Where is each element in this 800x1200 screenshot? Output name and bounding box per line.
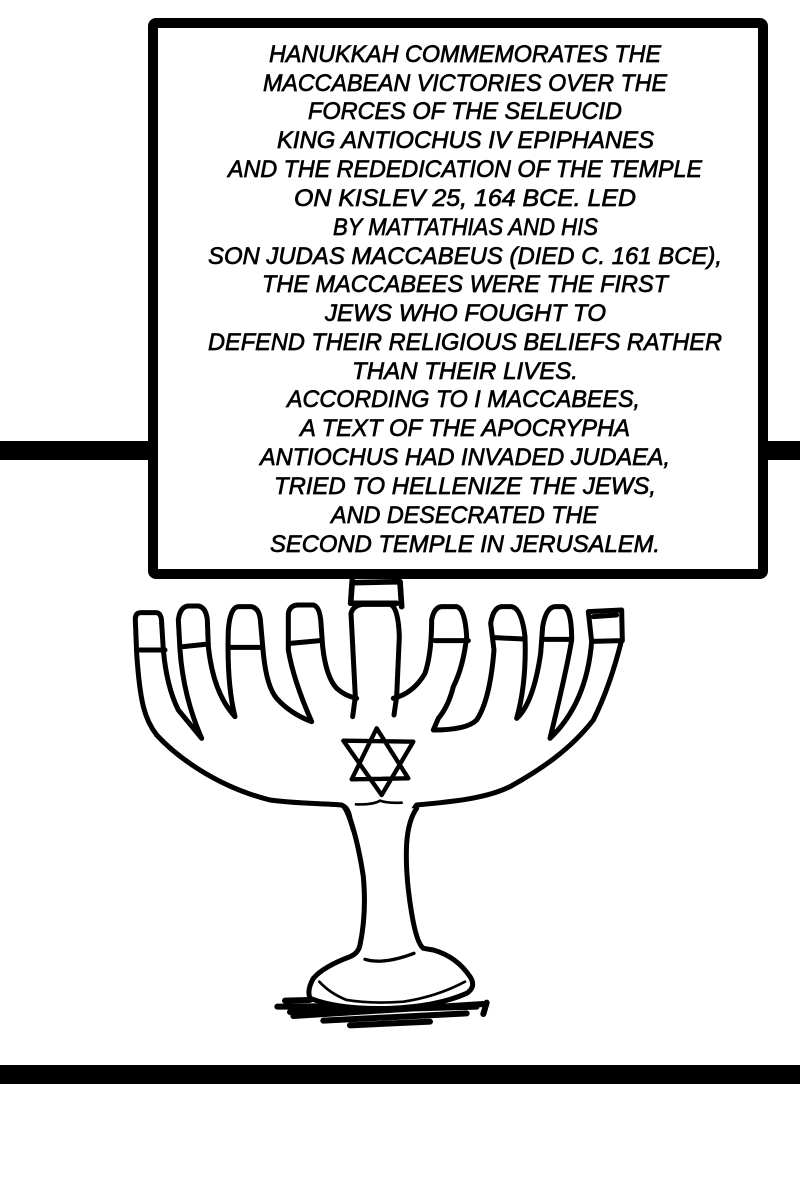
lower panel border [0, 1065, 800, 1084]
scribbled shadow under base [277, 1000, 487, 1025]
narration text: ON KISLEV 25, 164 BCE. LED [294, 185, 636, 212]
narration text: A TEXT OF THE APOCRYPHA [298, 415, 630, 442]
narration text: DEFEND THEIR RELIGIOUS BELIEFS RATHER [208, 329, 722, 356]
narration text: MACCABEAN VICTORIES OVER THE [263, 70, 668, 97]
menorah stem and base [309, 806, 473, 1009]
narration text: ANTIOCHUS HAD INVADED JUDAEA, [258, 444, 670, 471]
narration text: THAN THEIR LIVES. [352, 358, 578, 385]
menorah illustration [135, 580, 622, 1025]
narration text: ACCORDING TO I MACCABEES, [285, 386, 640, 413]
narration text: AND THE REDEDICATION OF THE TEMPLE [226, 156, 703, 183]
narration box [153, 23, 763, 574]
narration text: HANUKKAH COMMEMORATES THE [269, 41, 662, 68]
narration text: TRIED TO HELLENIZE THE JEWS, [274, 473, 656, 500]
narration text: AND DESECRATED THE [329, 502, 599, 529]
narration text: THE MACCABEES WERE THE FIRST [262, 271, 670, 298]
upper panel border right [764, 441, 800, 460]
narration text: BY MATTATHIAS AND HIS [333, 214, 599, 241]
star of David [343, 728, 413, 804]
narration text: KING ANTIOCHUS IV EPIPHANES [277, 127, 655, 154]
menorah branches and candle cups [135, 580, 622, 830]
narration text [208, 41, 722, 558]
narration text: SON JUDAS MACCABEUS (DIED C. 161 BCE), [208, 243, 722, 270]
narration text: FORCES OF THE SELEUCID [308, 98, 622, 125]
narration text: JEWS WHO FOUGHT TO [324, 300, 606, 327]
narration text: SECOND TEMPLE IN JERUSALEM. [270, 531, 660, 558]
upper panel border left [0, 441, 152, 460]
